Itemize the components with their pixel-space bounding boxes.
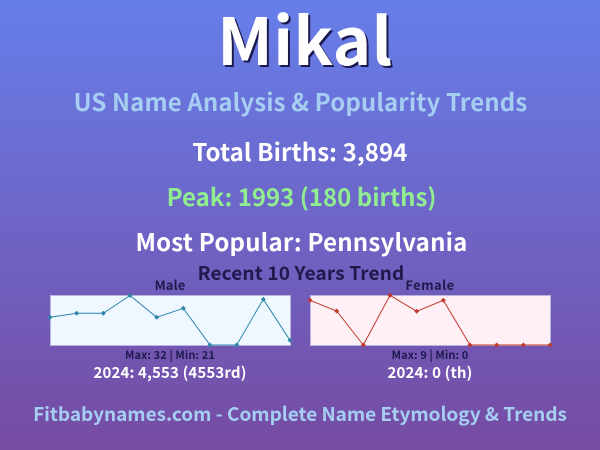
male line chart	[48, 293, 292, 348]
footer: Fitbabynames.com - Complete Name Etymology & Trends	[33, 400, 567, 427]
peak year: Peak: 1993 (180 births)	[167, 178, 436, 213]
female 2024 value: 2024: 0 (th)	[388, 362, 472, 383]
female line chart	[308, 292, 552, 348]
male max and min: Max: 32 | Min: 21	[125, 347, 215, 363]
panel: male trend	[48, 275, 292, 383]
female max and min: Max: 9 | Min: 0	[392, 347, 468, 363]
total births: Total Births: 3,894	[192, 133, 408, 168]
female label: Female	[405, 275, 455, 294]
male 2024 value: 2024: 4,553 (4553rd)	[93, 362, 247, 383]
subtitle: US Name Analysis & Popularity Trends	[74, 83, 527, 118]
trend heading: Recent 10 Years Trend	[198, 259, 404, 286]
panel: female trend	[308, 275, 552, 383]
most popular state: Most Popular: Pennsylvania	[135, 223, 468, 258]
male label: Male	[155, 275, 185, 294]
